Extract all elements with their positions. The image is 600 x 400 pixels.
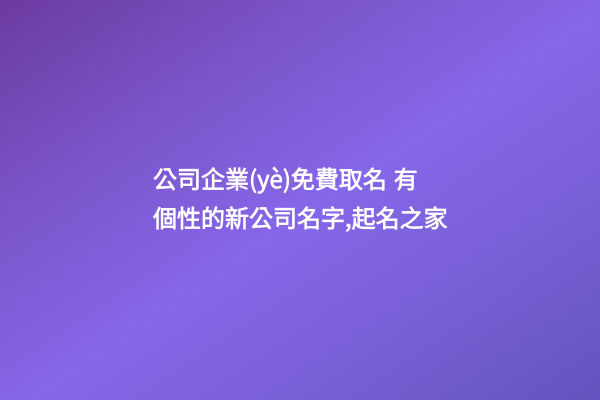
title (153, 160, 448, 234)
title line 1: 公司企業(yè)免費取名 有 (153, 160, 418, 195)
title line 2: 個性的新公司名字,起名之家 (153, 198, 448, 234)
